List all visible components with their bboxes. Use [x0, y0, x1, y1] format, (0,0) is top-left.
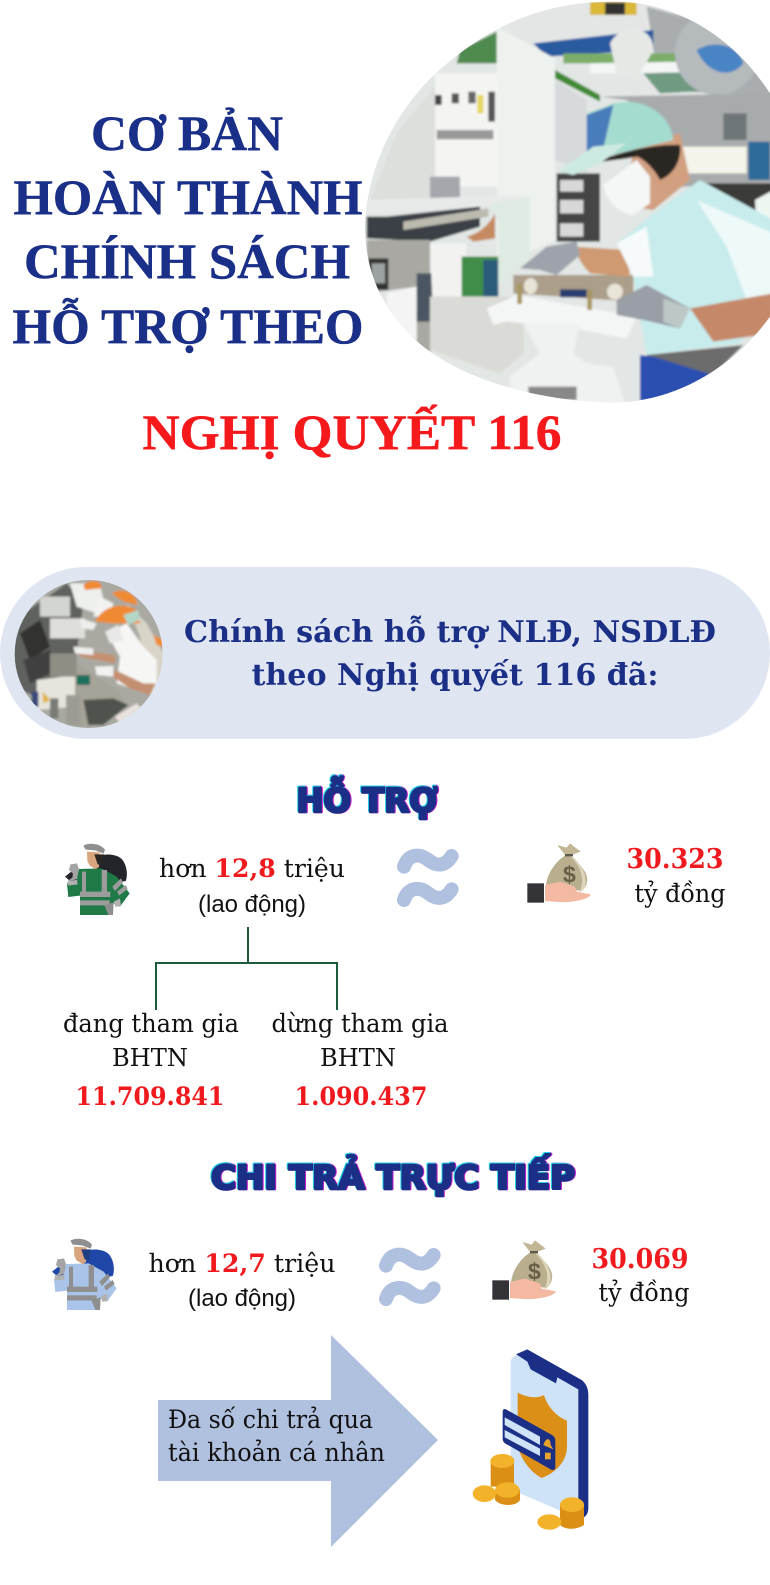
icon: phone with card and coins: [473, 1349, 588, 1530]
icon: hand holding money bag: $: [563, 862, 576, 888]
heading: Hỗ trợ: HỖ TRỢ: [296, 775, 438, 820]
text: stopped participating: [272, 1009, 449, 1111]
text: paid mostly via personal accounts: Đa số chi trả qua: [168, 1405, 373, 1434]
arrow with note: [158, 1335, 438, 1547]
text: workers supported: hơn 12,8 triệu: [159, 854, 345, 884]
text: currently participating: đang tham gia: [63, 1009, 239, 1038]
panel: policy heading pill: [0, 567, 770, 739]
text: currently participating: [63, 1009, 239, 1111]
text: 30.323 billion: 30.323: [626, 844, 724, 875]
text: unit labour: (lao động): [198, 891, 306, 918]
heading: Chi trả trực tiếp: CHI TRẢ TRỰC TIẾP: [211, 1153, 575, 1197]
title: CHÍNH SÁCH: [24, 233, 350, 289]
text: currently participating: 11.709.841: [76, 1082, 224, 1111]
text: stopped participating: 1.090.437: [294, 1082, 428, 1111]
icon: approximately sign: [404, 856, 452, 900]
text: pill heading: theo Nghị quyết 116 đã:: [252, 657, 658, 692]
coin stacks: [473, 1454, 584, 1530]
subtitle: Nghị quyết 116: NGHỊ QUYẾT 116: [142, 403, 562, 460]
text: currently participating: BHTN: [112, 1044, 188, 1072]
text: 30.069 billion: 30.069: [592, 1244, 688, 1275]
icon: worker in blue uniform: [52, 1239, 117, 1310]
text: workers paid: [148, 1249, 336, 1312]
text: 30.323 billion: tỷ đồng: [634, 879, 726, 909]
text: pill heading: [184, 614, 716, 692]
text: workers supported: [159, 854, 345, 918]
text: 30.069 billion: tỷ đồng: [598, 1278, 690, 1308]
pill photo: workers at assembly line: [13, 578, 163, 730]
text: 30.069 billion: [592, 1244, 690, 1308]
title: HOÀN THÀNH: [14, 169, 363, 225]
icon: approximately sign: [386, 1255, 434, 1299]
icon: hand holding money bag: $: [528, 1259, 541, 1285]
text: paid mostly via personal accounts: tài khoản cá nhân: [168, 1438, 385, 1467]
title: CƠ BẢN: [91, 105, 283, 161]
text: unit labour: (lao động): [188, 1285, 296, 1312]
text: workers paid: hơn 12,7 triệu: [148, 1249, 336, 1279]
title: HỖ TRỢ THEO: [12, 296, 364, 354]
icon: hand holding money bag: [527, 843, 591, 903]
text: 30.323 billion: [626, 844, 726, 909]
text: pill heading: Chính sách hỗ trợ NLĐ, NSDLĐ: [184, 614, 716, 649]
title: [12, 105, 364, 354]
text: stopped participating: BHTN: [320, 1044, 396, 1072]
hero photo: factory worker: [360, 0, 770, 410]
text: stopped participating: dừng tham gia: [272, 1009, 449, 1038]
icon: worker in green uniform: [65, 844, 130, 915]
icon: hand holding money bag: [492, 1240, 556, 1300]
tree connector: [156, 927, 337, 1010]
text: paid mostly via personal accounts: [168, 1405, 385, 1467]
